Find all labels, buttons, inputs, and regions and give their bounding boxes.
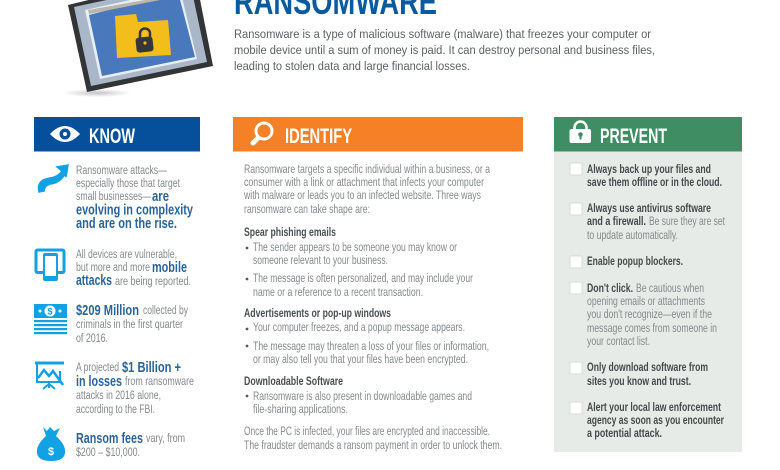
intro text: mobile device until a sum of money is paid. It can destroy personal and business files, <box>234 43 655 57</box>
checklist: don't click: you don't recognize—even if the <box>587 307 712 321</box>
spear phishing: name or a reference to a recent transaction. <box>253 285 423 299</box>
identify header: IDENTIFY <box>285 125 352 148</box>
stat: mobile attacks: are being reported. <box>115 274 191 288</box>
pop-up windows: Your computer freezes, and a popup message appears. <box>253 320 465 334</box>
stat: ransom fees <box>76 431 185 459</box>
stat: attacks on the rise: small businesses— <box>76 189 151 203</box>
know header <box>34 117 200 152</box>
identify conclusion: The fraudster demands a ransom payment in order to unlock them. <box>244 438 502 452</box>
stat: $1 billion in losses: in losses <box>76 374 122 390</box>
checklist: download: Only download software from <box>587 360 708 374</box>
icon: money bag <box>37 427 65 461</box>
pop-up windows: Advertisements or pop-up windows <box>244 306 391 320</box>
identify conclusion: Once the PC is infected, your files are encrypted and inaccessible. <box>244 424 490 438</box>
illustration: tablet with locked folder <box>63 0 213 97</box>
identify intro: Ransomware targets a specific individual within a business, or a <box>244 162 490 176</box>
stat: mobile attacks <box>76 247 191 289</box>
stat: attacks on the rise: especially those that target <box>76 176 180 190</box>
checklist: antivirus: and a firewall. <box>587 214 646 228</box>
identify intro: ransomware can take shape are: <box>244 202 370 216</box>
checklist: don't click: Don't click. <box>587 281 633 295</box>
checklist: back up: save them offline or in the cloud. <box>587 175 722 189</box>
icon: mobile devices <box>34 248 66 281</box>
icon: stack of money: $ <box>47 306 53 316</box>
checklist: popup blockers <box>570 254 683 268</box>
downloadable software: Downloadable Software <box>244 374 343 388</box>
stat: $209 million <box>76 303 189 345</box>
checklist: don't click: your contact list. <box>587 334 650 348</box>
stat: attacks on the rise: and are on the rise. <box>76 216 177 232</box>
icon: money bag: $ <box>48 446 54 458</box>
stat: $1 billion in losses: A projected <box>76 360 119 374</box>
identify conclusion <box>244 424 502 452</box>
prevent header <box>554 117 742 152</box>
checklist: antivirus <box>570 201 725 242</box>
prevent header: PREVENT <box>600 125 667 148</box>
stat: attacks on the rise <box>76 163 194 232</box>
spear phishing <box>244 225 473 299</box>
identify intro: with malware or leads you to an infected website. Three ways <box>243 188 481 202</box>
icon: yellow folder <box>115 14 171 58</box>
identify header <box>233 117 523 152</box>
panel: know <box>34 117 200 461</box>
checklist: download <box>570 360 708 388</box>
stat: $1 billion in losses: from ransomware <box>125 374 194 388</box>
checklist: alert law enforcement <box>570 400 724 440</box>
checklist: alert law enforcement: Alert your local law enforcement <box>587 400 721 414</box>
stat: ransom fees: $200 – $10,000. <box>76 445 140 459</box>
checklist: popup blockers: Enable popup blockers. <box>587 254 683 268</box>
spear phishing: The message is often personalized, and may include your <box>253 271 473 285</box>
downloadable software: Ransomware is also present in downloadable games and <box>253 389 472 403</box>
stat: $1 billion in losses: attacks in 2016 alone, <box>76 388 161 402</box>
stat: attacks on the rise: Ransomware attacks— <box>76 163 167 177</box>
checklist: back up: Always back up your files and <box>587 162 711 176</box>
stat: $209 million: collected by <box>143 303 189 317</box>
stat: $1 billion in losses: $1 Billion + <box>122 360 181 376</box>
stat: mobile attacks: mobile <box>152 260 187 276</box>
panel: identify <box>233 117 523 452</box>
stat: attacks on the rise: are <box>152 189 169 205</box>
stat: mobile attacks: but more and more <box>76 260 150 274</box>
checklist: antivirus: to update automatically. <box>587 228 678 242</box>
stat: $1 billion in losses: according to the FBI. <box>76 402 155 416</box>
stat: $209 million: of 2016. <box>76 331 108 345</box>
downloadable software: file-sharing applications. <box>253 402 348 416</box>
pop-up windows: The message may threaten a loss of your files or information, <box>253 339 489 353</box>
intro text: Ransomware is a type of malicious software (malware) that freezes your computer or <box>234 27 651 41</box>
checklist: alert law enforcement: a potential attack. <box>587 426 662 440</box>
icon: stack of money <box>34 304 67 334</box>
checklist: download: sites you know and trust. <box>587 374 691 388</box>
icon: falling chart <box>35 363 64 389</box>
spear phishing: Spear phishing emails <box>244 225 336 239</box>
know header: KNOW <box>89 125 135 148</box>
spear phishing: The sender appears to be someone you may know or <box>253 240 457 254</box>
checklist: don't click: message comes from someone in <box>587 321 717 335</box>
checklist: antivirus: Always use antivirus software <box>587 201 711 215</box>
identify intro: consumer with a link or attachment that infects your computer <box>244 175 484 189</box>
checklist: don't click <box>570 281 717 348</box>
stat: $209 million: $209 Million <box>76 303 139 319</box>
stat: mobile attacks: All devices are vulnerable, <box>76 247 177 261</box>
spear phishing: someone relevant to your business. <box>253 253 388 267</box>
checklist: alert law enforcement: agency as soon as you encounter <box>587 413 724 427</box>
pop-up windows: or may also tell you that your files have been encrypted. <box>253 352 468 366</box>
checklist: back up <box>570 162 722 189</box>
intro text: leading to stolen data and large financial losses. <box>234 59 470 73</box>
stat: attacks on the rise: evolving in complexity <box>76 202 194 218</box>
panel: prevent <box>554 117 742 452</box>
icon: rising arrow <box>38 165 68 192</box>
stat: $1 billion in losses <box>76 360 194 416</box>
stat: $209 million: criminals in the first quarter <box>76 317 183 331</box>
stat: mobile attacks: attacks <box>76 273 112 289</box>
stat: ransom fees: Ransom fees <box>76 431 143 447</box>
intro text <box>234 27 655 73</box>
checklist: antivirus: Be sure they are set <box>649 214 725 228</box>
identify intro <box>243 162 490 216</box>
pop-up windows <box>244 306 489 366</box>
stat: ransom fees: vary, from <box>146 431 185 445</box>
checklist: don't click: Be cautious when <box>636 281 704 295</box>
downloadable software <box>244 374 472 416</box>
checklist: don't click: opening emails or attachments <box>587 294 705 308</box>
